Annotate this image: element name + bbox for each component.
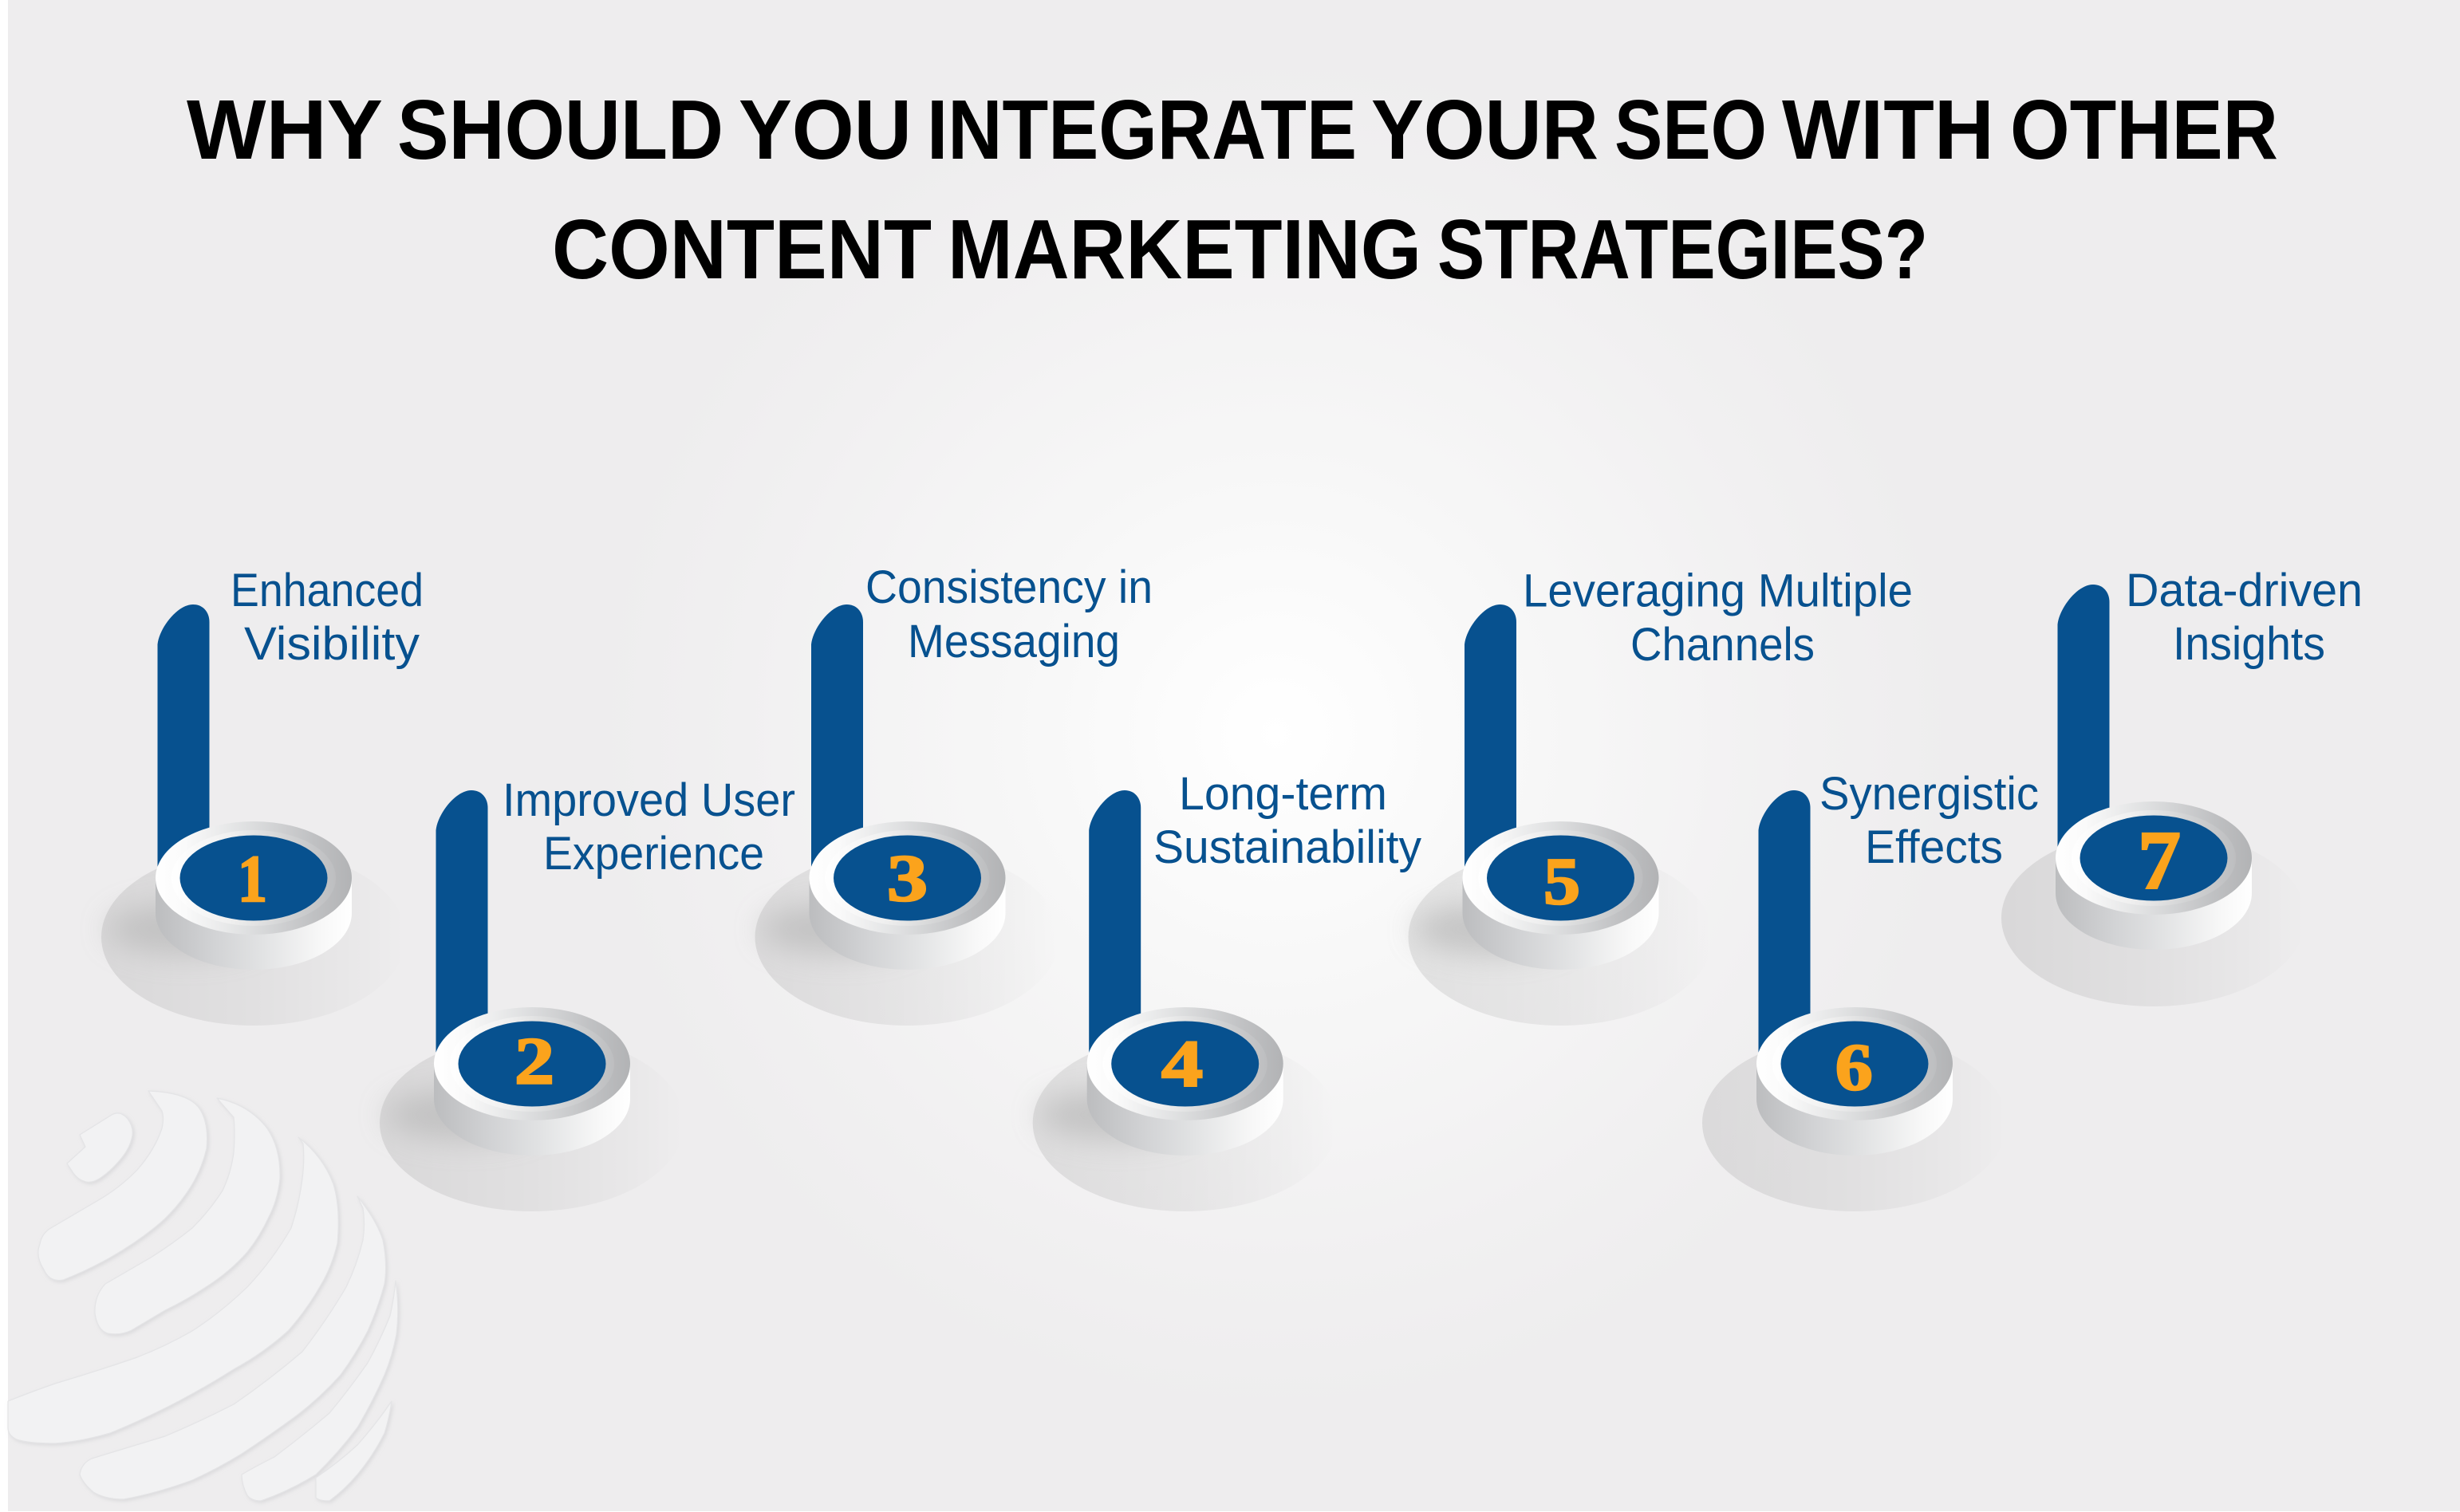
step 3 pedestal: 3 [887,841,928,915]
step 2 pedestal: 2 [514,1024,554,1099]
step 4 label [1153,768,1421,873]
step 5 label: Channels [1630,619,1815,671]
step 4 [1033,768,1421,1211]
step 7 label [2126,565,2363,670]
step 5 [1409,565,1913,1026]
step 5 pedestal [1409,604,1713,1026]
step 1 [101,565,424,1026]
step 7 label: Data-driven [2126,565,2363,616]
step 7 label: Insights [2173,618,2325,670]
title: INTEGRATE [927,83,1357,177]
step 3 label: Consistency in [865,561,1153,613]
step 6 pedestal [1702,790,2007,1211]
step 4 pedestal [1033,790,1338,1211]
step 2 pedestal [380,790,684,1211]
step 5 pedestal: 5 [1543,845,1580,919]
title: YOU [739,83,912,177]
step 2 label: Improved User [503,774,795,826]
step 2 label: Experience [543,828,764,880]
title: WHY [187,83,383,177]
step 1 pedestal [101,604,406,1026]
step 7 pedestal [2001,585,2306,1006]
step 3 label: Messaging [908,616,1120,667]
step 3 label [865,561,1153,667]
step 1 pedestal: 1 [238,842,267,916]
step 6 label [1819,768,2039,873]
title: SHOULD [397,83,723,177]
step 5 label [1523,565,1913,671]
title: WITH [1782,83,1994,177]
step 7 pedestal: 7 [2138,813,2181,907]
title: MARKETING [948,203,1421,297]
step 1 label [231,565,424,670]
step 2 [380,774,795,1211]
title: STRATEGIES? [1437,203,1928,297]
title: SEO [1614,83,1767,177]
title [187,83,2278,297]
title: OTHER [2010,83,2278,177]
step 4 label: Long-term [1179,768,1387,820]
step 6 [1702,768,2039,1211]
step 6 label: Synergistic [1819,768,2039,820]
step 6 pedestal: 6 [1835,1030,1873,1104]
step 4 label: Sustainability [1153,821,1421,873]
step 2 label [503,774,795,880]
step 7 [2001,565,2363,1006]
step 5 label: Leveraging Multiple [1523,565,1913,617]
title: YOUR [1371,83,1599,177]
step 6 label: Effects [1865,821,2003,873]
step 1 label: Enhanced [231,565,424,616]
step 1 label: Visibility [244,618,420,670]
title: CONTENT [552,203,932,297]
step 3 pedestal [755,604,1059,1026]
watermark globe [8,1091,398,1501]
step 3 [755,561,1153,1026]
step 4 pedestal: 4 [1161,1027,1203,1101]
